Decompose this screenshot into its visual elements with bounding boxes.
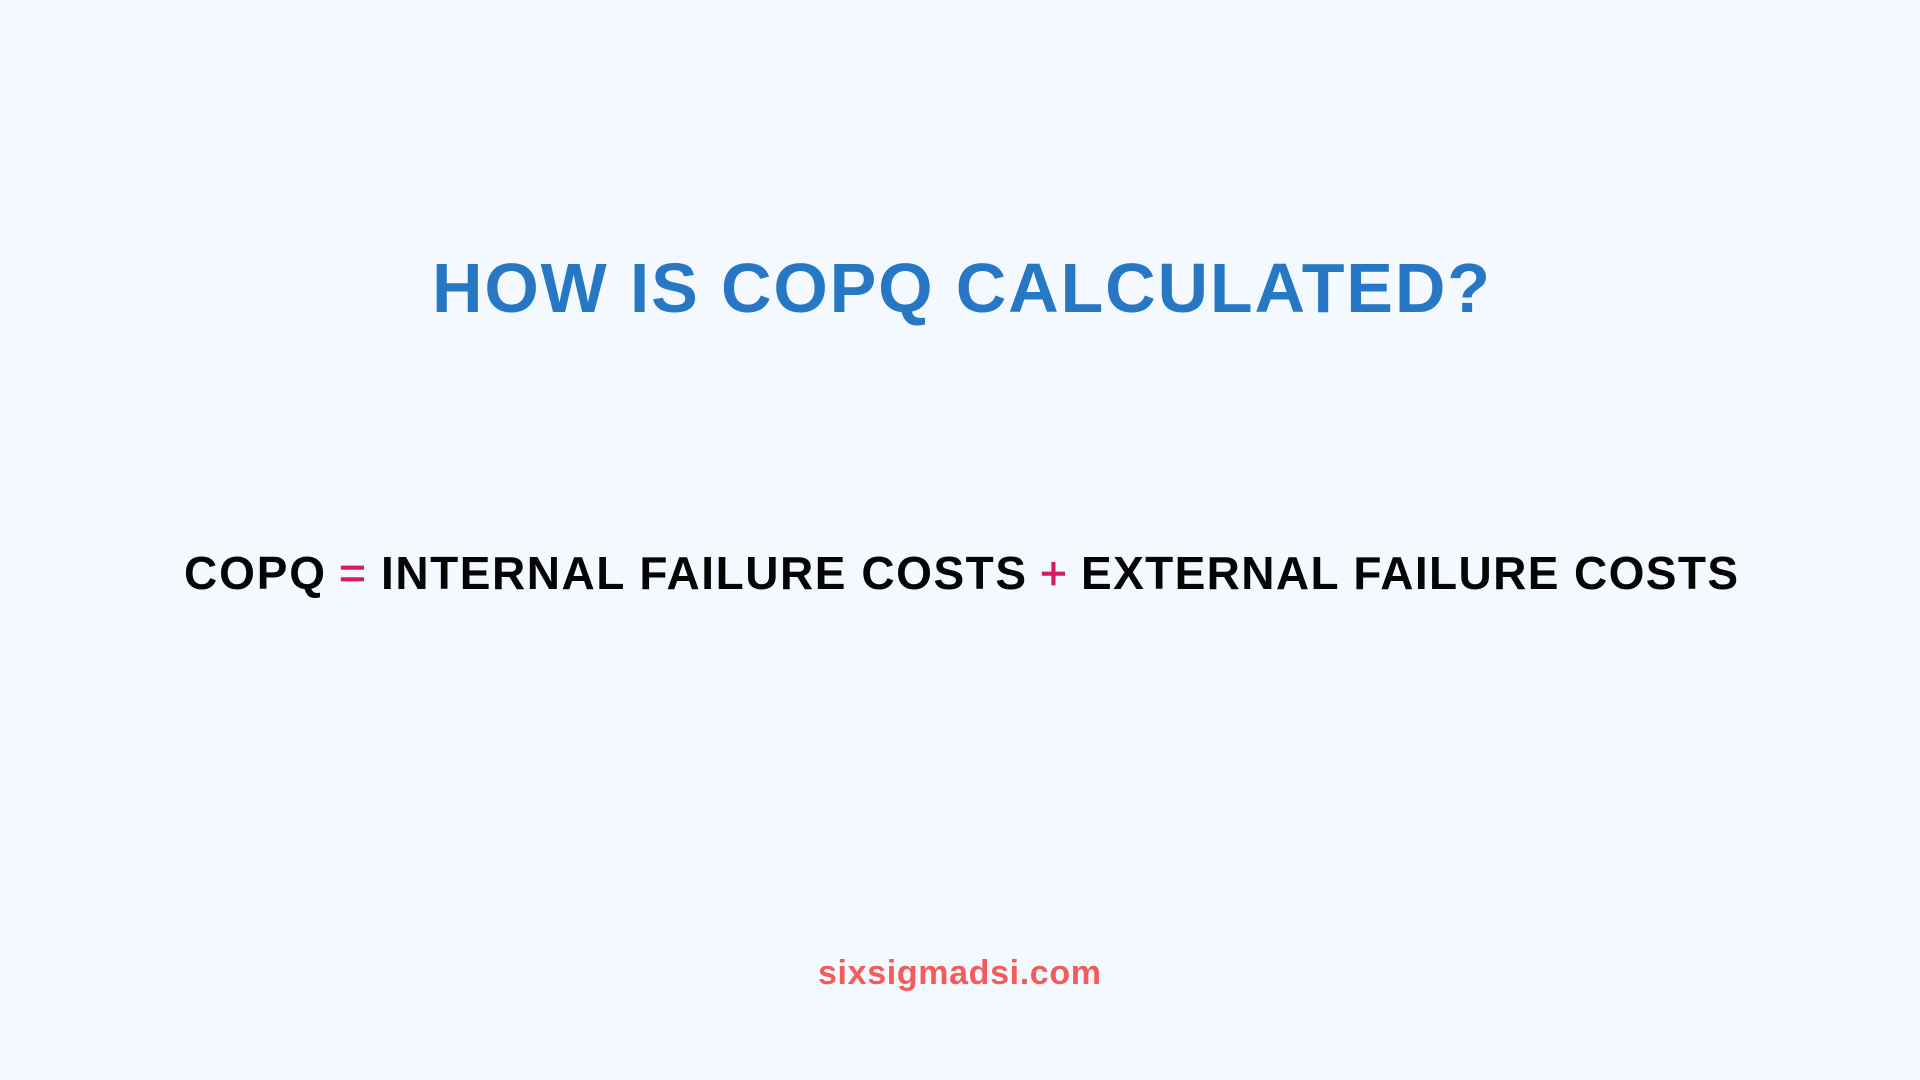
formula: = — [339, 547, 366, 599]
formula: COPQ — [184, 547, 325, 599]
formula: EXTERNAL FAILURE COSTS — [1081, 547, 1738, 599]
title: HOW IS COPQ CALCULATED? — [432, 249, 1490, 327]
formula: + — [1040, 547, 1067, 599]
website footer: sixsigmadsi.com — [818, 954, 1101, 992]
formula: INTERNAL FAILURE COSTS — [381, 547, 1026, 599]
formula — [184, 547, 1738, 599]
